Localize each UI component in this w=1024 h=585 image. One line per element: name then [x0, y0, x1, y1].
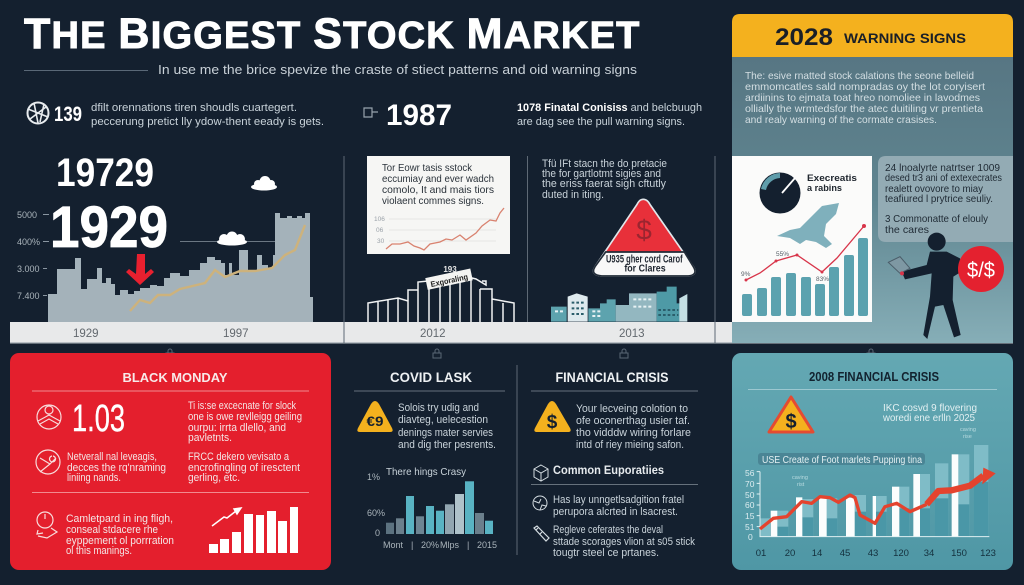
column: covid lask: diavteg, uelecestion	[398, 414, 488, 426]
icon: envelope person	[37, 405, 61, 429]
arrow: red down	[126, 254, 154, 285]
chart: bars and trend: 15	[745, 511, 755, 521]
caption band: USE Create of Foot marlets Pupping tina	[762, 455, 922, 466]
column: covid lask: 1%	[367, 472, 380, 482]
panel: black monday: conseal stdacere rhe	[66, 524, 158, 536]
panel: black monday: decces the rq'nraming	[67, 462, 166, 474]
chart: bars and trend: 01	[756, 548, 766, 559]
stat: 1.03	[72, 398, 125, 440]
year heading: 1929: 1929	[50, 195, 168, 260]
icon: key outline	[364, 108, 378, 117]
column: covid lask: 20%	[421, 540, 439, 550]
panel: 2008 financial crisis: woredi ene erlln 2025	[882, 412, 975, 424]
icon: warning: $	[547, 412, 558, 433]
panel heading: WARNING SIGNS	[844, 31, 966, 46]
chart: bars and trend	[745, 445, 996, 559]
panel: 2028 warning signs	[732, 14, 1013, 343]
callout: light box	[878, 156, 1013, 242]
white card with line chart: 30	[377, 238, 385, 245]
panel: black monday	[10, 353, 331, 570]
column: covid lask: 60%	[367, 508, 385, 518]
white box: executive chart: 83%	[816, 276, 829, 283]
panel heading: 2008 FINANCIAL CRISIS	[809, 370, 939, 384]
chart: bars and trend: 123	[980, 548, 996, 559]
icon: broken circle	[36, 450, 60, 474]
column: covid lask: |	[411, 540, 413, 550]
column: financial crisis: intd of riey mieing safon.	[576, 439, 684, 451]
chart: bars and trend: 0	[748, 532, 753, 542]
panel text: and realy warning of the cormate crasises.	[745, 114, 937, 126]
city skyline	[551, 287, 687, 322]
chart: bars and trend: 50	[745, 490, 755, 500]
panel text: emmomcatles sald nompradas oy the lot coryisert	[745, 81, 985, 93]
column: covid lask: and dig ther pesrents.	[398, 439, 496, 451]
intro: 139: peccerung pretict lly ydow-thent eeady is gets.	[91, 116, 324, 128]
panel text: ollially the wrmtedsfor the atec duitiling vr prentieta	[745, 103, 983, 115]
icon: red dollar circle	[958, 246, 1004, 292]
outline building with sign: 193	[443, 265, 457, 274]
column: covid lask: Mont	[383, 540, 404, 550]
timeline year labels: 2019	[925, 328, 951, 340]
panel: black monday: gerling, etc.	[188, 472, 240, 484]
column: covid lask: 0	[375, 528, 380, 538]
chart: bars and trend: 45	[840, 548, 850, 559]
title: THE BIGGEST STOCK MARKET	[24, 10, 641, 58]
icon: warning triangle: U935 gher cord Carof	[606, 253, 683, 265]
timeline bar	[10, 322, 1013, 344]
panel: black monday: Netverall nal leveagis,	[67, 451, 157, 463]
column: financial crisis: perupora alcrted in lsacrest.	[553, 506, 678, 518]
callout: light box: realett ovovore to miay	[885, 183, 984, 195]
chart: bars and trend: 120	[893, 548, 909, 559]
white card with line chart: violaent commes signs.	[382, 195, 484, 207]
chart: bars and trend: 14	[812, 548, 822, 559]
icon: person with tablet	[888, 233, 964, 339]
axis labels	[17, 210, 40, 301]
timeline year labels: 1997	[223, 328, 249, 340]
white box: executive chart: a rabins	[807, 183, 842, 194]
column: covid lask: Mlps	[440, 540, 460, 550]
icon: clouds	[217, 176, 277, 246]
white box: executive chart: Execreatis	[807, 173, 857, 184]
column: financial crisis: ofe oconerthag usier taf.	[576, 415, 690, 427]
column divider	[516, 365, 518, 555]
column: financial crisis: sttade scorages vlion at s05 stick	[553, 536, 695, 548]
axis labels: 7.400	[17, 291, 40, 301]
panel text	[745, 70, 985, 126]
callout: light box: the cares	[885, 224, 929, 236]
white box: executive chart: 9%	[741, 271, 751, 278]
panel: black monday: Camletpard in ing fligh,	[66, 513, 173, 525]
panel heading	[775, 24, 966, 51]
white card with line chart: Tor Eowr tasis sstock	[382, 162, 473, 174]
column: covid lask: COVID LASK	[390, 369, 472, 385]
intro: 1987	[364, 99, 702, 132]
icon: globe badge	[28, 102, 48, 124]
icon: head profile	[37, 512, 57, 538]
column: financial crisis: FINANCIAL CRISIS	[556, 369, 668, 385]
column: financial crisis: Your lecveing colotion to	[576, 403, 688, 415]
timeline year labels	[73, 328, 951, 340]
panel: black monday: liniing nands.	[67, 472, 121, 484]
icon: warning triangle	[593, 199, 695, 276]
column: financial crisis: tho vidddw wiring forlare	[576, 427, 691, 439]
text block: middle column: the eriss faerat sigh cftutly	[542, 178, 666, 190]
icon: warning	[769, 397, 813, 433]
column: covid lask: denings mater servies	[398, 427, 493, 439]
white box: executive chart	[732, 156, 872, 322]
panel text: ardiinins to ejmata toat hreo nomoliee in lavodmes	[745, 92, 980, 104]
intro: 139	[28, 102, 324, 128]
axis labels: 400%	[17, 237, 40, 247]
white box: executive chart: 55%	[776, 251, 789, 258]
chart: bars and trend: 34	[924, 548, 934, 559]
chart: bars and trend: 70	[745, 479, 755, 489]
column: financial crisis: tougtr steel ce prtanes.	[553, 547, 659, 559]
timeline year labels: 1929	[73, 328, 99, 340]
small lock icons	[166, 349, 875, 358]
bar chart: white	[209, 507, 298, 553]
column: covid lask: 2015	[477, 540, 497, 550]
icon: globe	[533, 496, 547, 510]
subtitle: In use me the brice spevize the craste of stiect patterns and oid warning signs	[158, 62, 638, 77]
arrow: trend	[212, 508, 241, 526]
icon: warning: $	[785, 411, 797, 433]
chart: 1929 skyline	[17, 176, 313, 322]
callout: light box: desed tr3 ani of extexecrates	[885, 172, 1002, 184]
intro: 1987: 1987	[386, 99, 452, 132]
column: covid lask	[354, 369, 505, 550]
year heading: 19729: 19729	[56, 151, 154, 195]
map shape	[777, 203, 839, 248]
column: covid lask: |	[467, 540, 469, 550]
panel: black monday: Ti is:se excecnate for slock	[188, 400, 296, 412]
callout: light box: 3 Commonatte of elouly	[885, 213, 989, 225]
white card with line chart: 106	[374, 216, 385, 223]
panel: black monday: one is owe revlleigg geiling	[188, 411, 302, 423]
intro: 139: 139	[54, 103, 82, 126]
panel: black monday: ourpu: irrta dlello, and	[188, 422, 286, 434]
icon: warning triangle: for Clares	[624, 263, 666, 274]
intro: 1987: are dag see the pull warning signs.	[517, 116, 685, 128]
column: financial crisis: Regleve ceferates the deval	[553, 524, 663, 536]
panel text: The: esive rnatted stock calations the seone belleid	[745, 70, 974, 82]
icon: warning	[534, 401, 571, 433]
bars	[742, 238, 868, 316]
panel: 2008 financial crisis: rise	[963, 434, 972, 440]
column: financial crisis	[531, 369, 698, 559]
intro: 1987: 1078 Finatal Conisiss and belcbuugh	[517, 102, 702, 114]
column: financial crisis: Common Euporatiies	[553, 465, 664, 477]
panel heading: 2028	[775, 24, 833, 51]
axis labels: 5000	[17, 210, 37, 220]
white card with line chart: 06	[376, 227, 384, 234]
icon: tool	[534, 526, 549, 541]
panel: black monday: pavletnts.	[188, 432, 232, 444]
panel: black monday: encrofingling of iresctent	[188, 462, 300, 474]
callout: light box: 24 lnoalyrte natrtser 1009	[885, 162, 1000, 174]
panel: black monday: FRCC dekero vevisato a	[188, 451, 290, 463]
panel: 2008 financial crisis	[732, 353, 1013, 570]
timeline year labels: 2012	[420, 328, 446, 340]
chart: bars and trend: 20	[785, 548, 795, 559]
callout: light box: teafiured l prytrice seuliy.	[885, 193, 993, 205]
bar chart	[386, 481, 493, 534]
text block: middle column: the for gartlotmt sigies and	[542, 168, 661, 180]
icon: warning: €9	[366, 413, 384, 429]
intro: 139: dfilt orennations tiren shoudls cuartegert.	[91, 102, 297, 114]
column: covid lask: There hings Crasy	[386, 466, 467, 478]
panel: 2008 financial crisis: caving	[960, 427, 976, 433]
icon: warning	[357, 401, 393, 432]
chart: bars and trend: 43	[868, 548, 878, 559]
sign label: Exgoraling	[430, 272, 469, 289]
panel: black monday: eyppement ol porrration	[66, 535, 174, 547]
panel: 2008 financial crisis: IKC cosvd 9 flovering	[883, 402, 977, 414]
chart: bars and trend: 150	[951, 548, 967, 559]
text block: middle column	[542, 158, 667, 201]
icon: warning triangle: $	[636, 214, 652, 245]
column: covid lask: Solois try udig and	[398, 402, 479, 414]
chart: bars and trend: 56	[745, 468, 755, 478]
white card with line chart: comolo, It and mais tiors	[382, 184, 494, 196]
white card with line chart	[367, 156, 510, 254]
panel: black monday: ol this manings.	[66, 545, 132, 557]
chart: bars and trend: 51	[745, 522, 755, 532]
outline building with sign	[368, 265, 514, 322]
column: financial crisis: Has lay unngetlsadgition fratel	[553, 494, 684, 506]
white card with line chart: eccumiay and ever wadch	[382, 173, 494, 185]
timeline dividers	[344, 156, 715, 343]
icon: cube	[534, 465, 548, 481]
icon: red dollar circle: $/$	[967, 259, 995, 282]
panel heading: BLACK MONDAY	[122, 371, 228, 385]
panel: 2008 financial crisis: rist	[797, 482, 805, 488]
icon: gauge pie	[760, 172, 800, 214]
timeline year labels: 2017	[791, 328, 817, 340]
timeline year labels: 2013	[619, 328, 645, 340]
red line	[744, 224, 866, 282]
chart: bars and trend: 60	[745, 500, 755, 510]
axis labels: 3.000	[17, 264, 40, 274]
text block: middle column: Tfü IFt stacn the do pretacie	[542, 158, 667, 170]
panel: 2008 financial crisis: caving	[792, 475, 808, 481]
text block: middle column: duted in iting.	[542, 189, 604, 201]
